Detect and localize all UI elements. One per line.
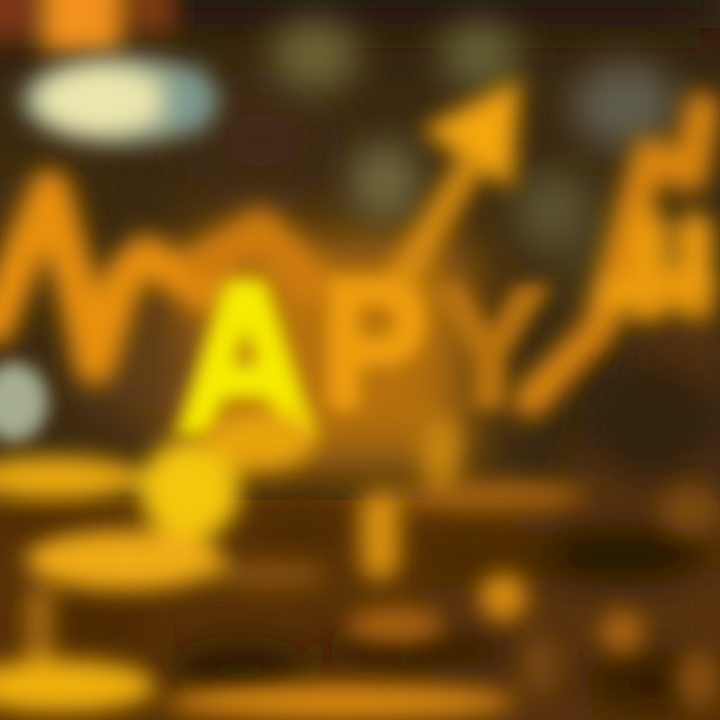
APY letters: A [178,240,313,475]
lower background band [0,500,720,720]
bokeh background lights [271,19,677,250]
top lamp glow [0,0,175,52]
APY letters [178,240,548,475]
left zigzag line [0,190,310,365]
APY letters: Y [430,252,548,442]
left pale blob [0,362,48,442]
background colour masses [0,0,720,470]
right zigzag line [530,110,702,400]
dark coin stacks on the right [0,320,720,720]
APY letters: P [322,243,427,444]
pale lamp blob [22,56,218,144]
rising arrow [395,78,520,290]
gold coins on the left and bottom [0,410,720,720]
